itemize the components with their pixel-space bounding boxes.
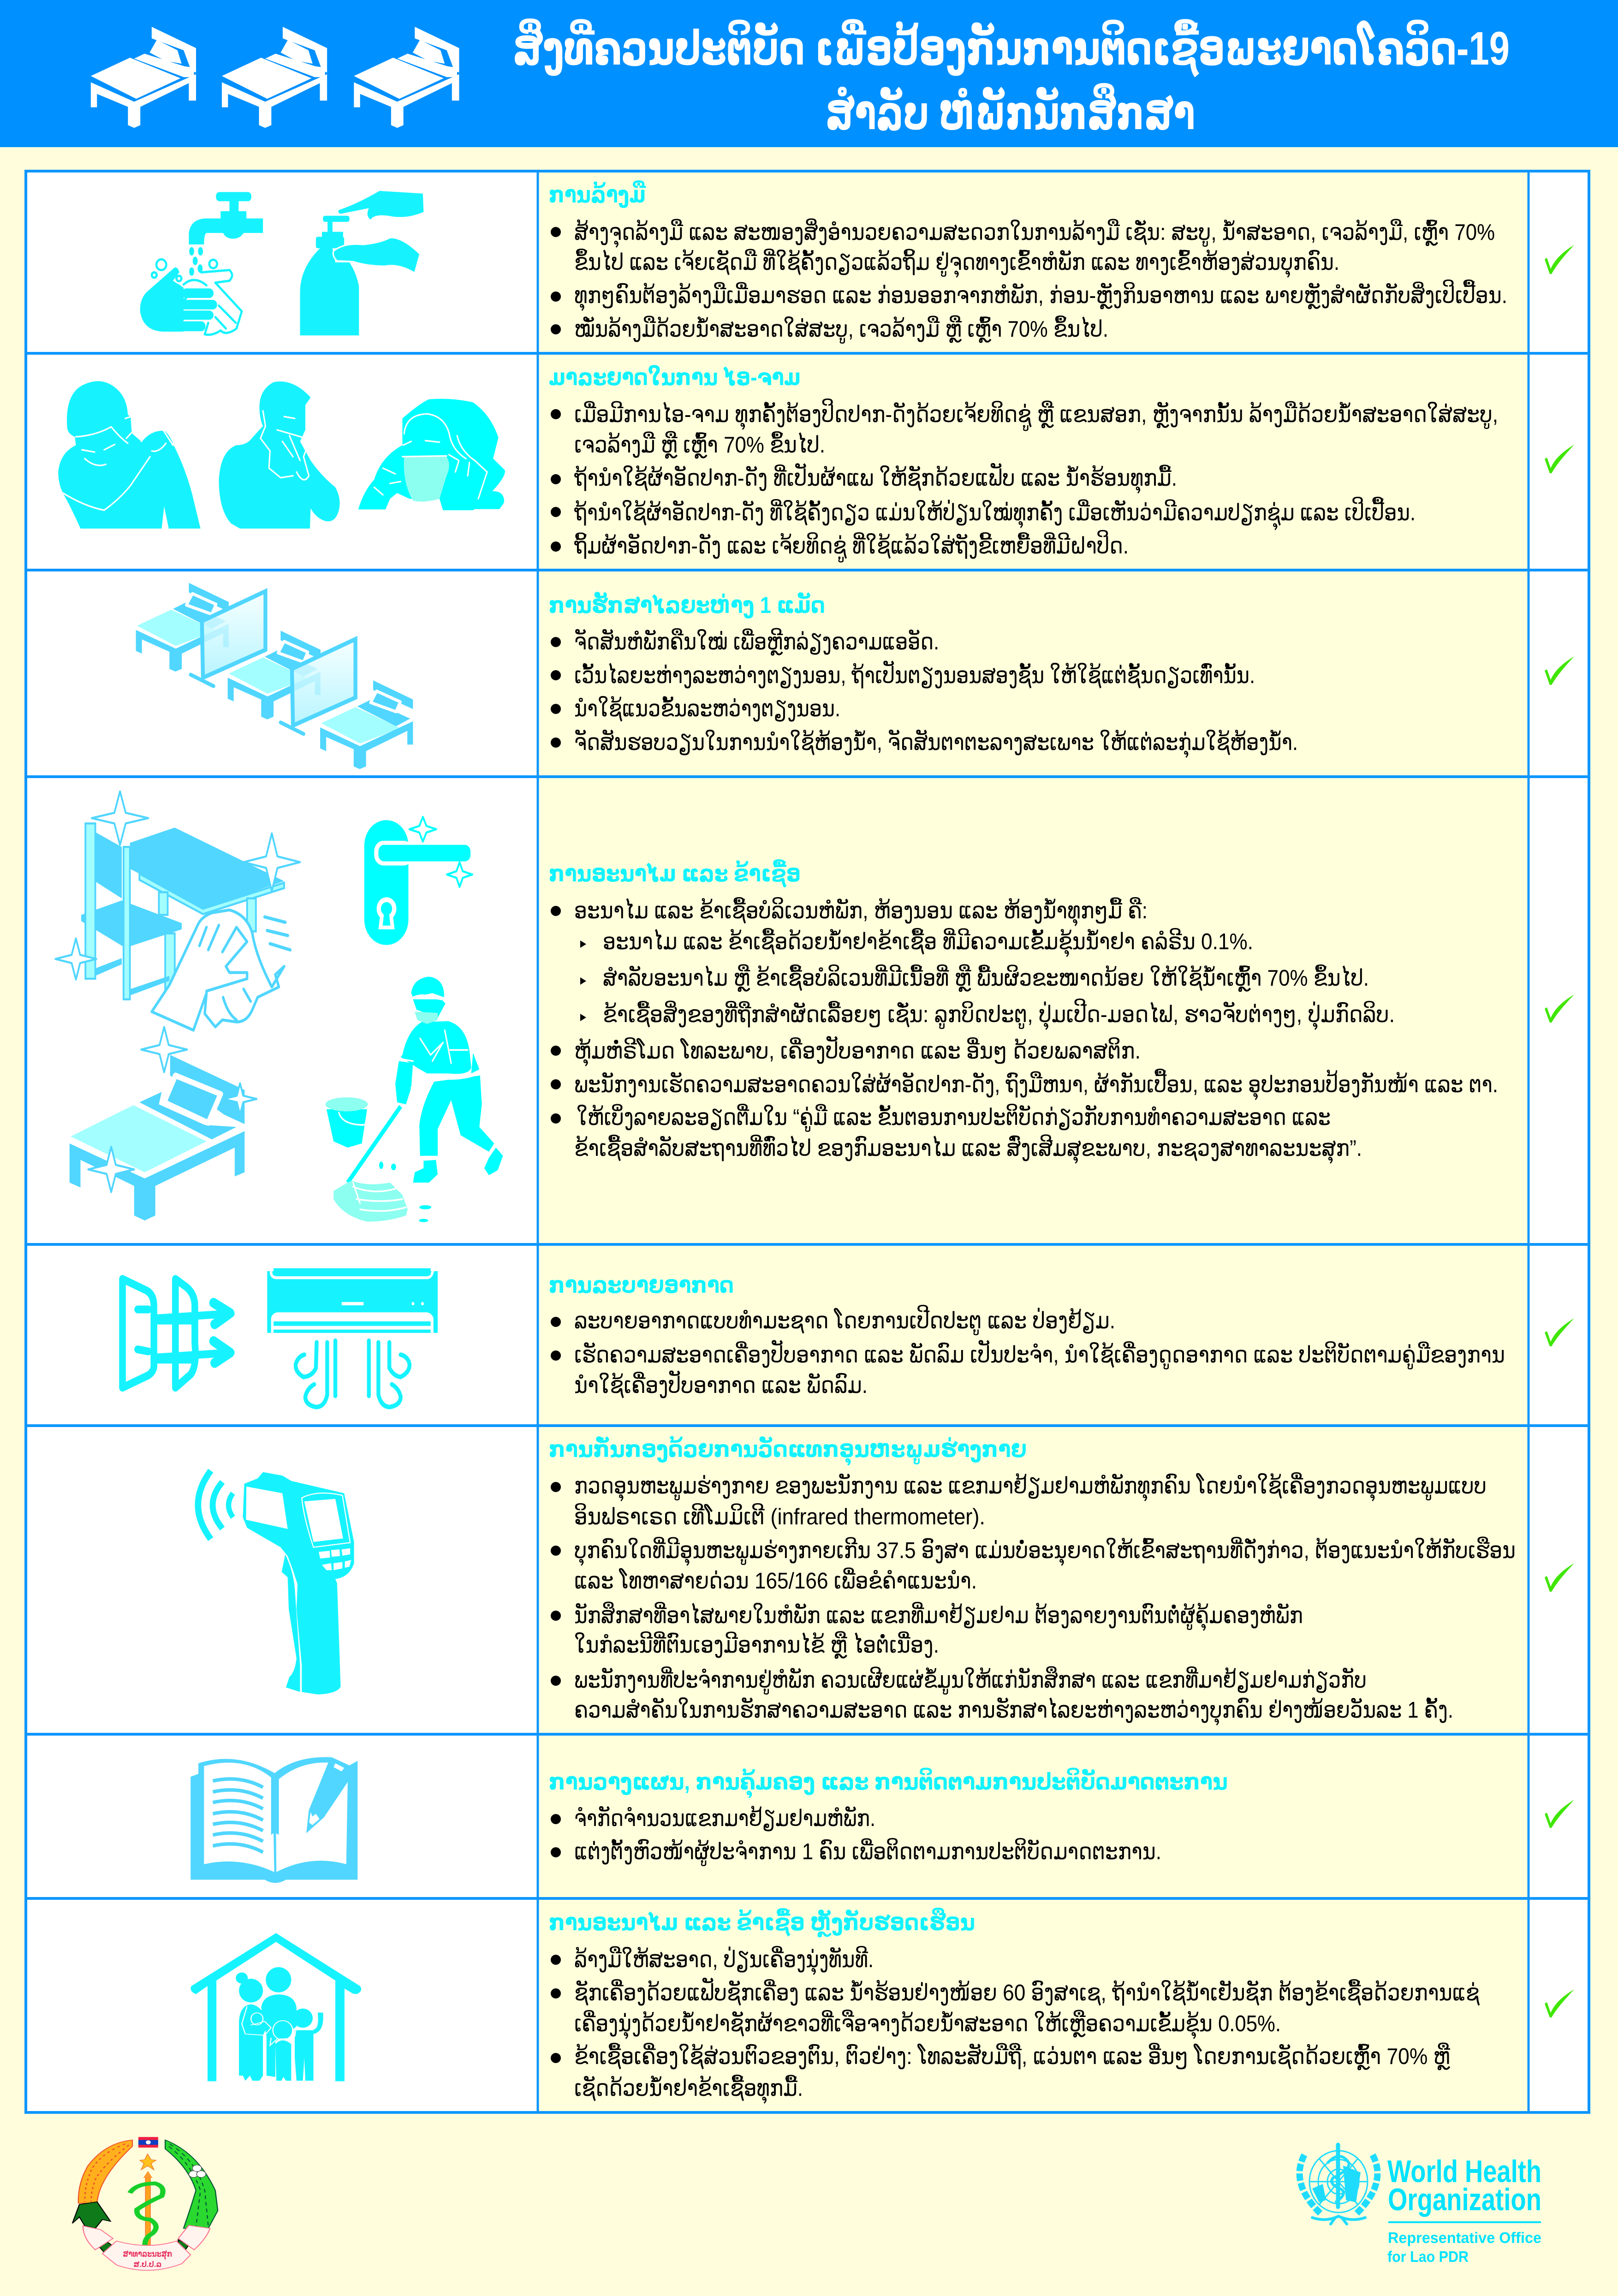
- sub-element: emblem caption: [123, 2249, 172, 2269]
- bullet list: ຈັດສັນຫໍພັກຄືນໃໝ່ ເພື່ອຫຼີກລ່ຽງຄວາມແອອັດ.: [574, 627, 939, 656]
- sub-icon: open window with airflow arrows: [123, 1279, 231, 1388]
- heading: ການກັ່ນກອງດ້ວຍການວັດແທກອຸນຫະພູມຮ່າງກາຍ: [549, 1436, 1027, 1466]
- icon: window and air conditioner: [123, 1267, 438, 1407]
- bullet list: ນຳໃຊ້ເຄື່ອງປັບອາກາດ ແລະ ພັດລົມ.: [574, 1370, 868, 1398]
- bullet list: ຈຳກັດຈຳນວນແຂກມາຢ້ຽມຢາມຫໍພັກ.: [574, 1805, 875, 1832]
- text: cleaning and disinfection: [549, 859, 1498, 1164]
- bullet list: ໃຫ້ເບິ່ງລາຍລະອຽດຕື່ມໃນ “ຄູ່ມື ແລະ ຂັ້ນຕອນການປະຕິບັດກ່ຽວກັບການທຳຄວາມສະອາດ ແລະ: [577, 1103, 1331, 1132]
- bullet list: ລ້າງມືໃຫ້ສະອາດ, ປ່ຽນເຄື່ອງນຸ່ງທັນທີ.: [574, 1945, 874, 1975]
- bullet list: ຖ້ານຳໃຊ້ຜ້າອັດປາກ-ດັງ ທີ່ເປັນຜ້າແພ ໃຫ້ຊັກດ້ວຍແຟັບ ແລະ ນ້ຳຮ້ອນທຸກມື້.: [574, 462, 1177, 494]
- text: cough and sneeze etiquette: [549, 364, 1498, 563]
- sub-icon: sparkles: [55, 791, 300, 1192]
- text: ventilation: [549, 1272, 1505, 1398]
- header band: [0, 0, 1618, 147]
- sub-icon: chair and table: [81, 823, 284, 999]
- sub-icon: door handle: [364, 817, 472, 945]
- sub-element: pink ribbons with text: [83, 2225, 210, 2270]
- bullet list: ໝັ່ນລ້າງມືດ້ວຍນ້ຳສະອາດໃສ່ສະບູ, ເຈວລ້າງມື ຫຼື ເຫຼົ້າ 70% ຂຶ້ນໄປ.: [574, 315, 1108, 344]
- sub-element: emblem caption: ສ.ປ.ປ.ລ: [133, 2260, 162, 2269]
- bullet list: ຖ້ານຳໃຊ້ຜ້າອັດປາກ-ດັງ ທີ່ໃຊ້ຄັ້ງດຽວ ແມ່ນໃຫ້ປ່ຽນໃໝ່ທຸກຄັ້ງ ເມື່ອເຫັນວ່າມີຄວາມປຽກຊຸ່ມ ແລະ ເປິເປື້ອນ.: [574, 496, 1416, 531]
- sub-element: rod and snake: [130, 2171, 163, 2250]
- text: temperature screening: [549, 1436, 1516, 1726]
- heading: ມາລະຍາດໃນການ ໄອ-ຈາມ: [549, 364, 801, 390]
- logo: Lao Ministry of Health emblem: [72, 2137, 218, 2270]
- bullet list: [551, 896, 1498, 1164]
- bullet list: ແລະ ໂທຫາສາຍດ່ວນ 165/166 ເພື່ອຂໍຄຳແນະນຳ.: [574, 1567, 977, 1594]
- bullet list: ຂ້າເຊື້ອສຳລັບສະຖານທີ່ທົ່ວໄປ ຂອງກົມອະນາໄມ ແລະ ສົ່ງເສີມສຸຂະພາບ, ກະຊວງສາທາລະນະສຸກ”.: [574, 1134, 1362, 1164]
- bullet list: ບຸກຄົນໃດທີ່ມີອຸນຫະພູມຮ່າງກາຍເກີນ 37.5 ອົງສາ ແມ່ນບໍ່ອະນຸຍາດໃຫ້ເຂົ້າສະຖານທີ່ດັ່ງກ່າວ, ຕ້ອງແນະນຳໃຫ້ກັບເຮືອນ: [574, 1536, 1516, 1566]
- heading: ການອະນາໄມ ແລະ ຂ້າເຊື້ອ ຫຼັງກັບຮອດເຮືອນ: [549, 1907, 975, 1938]
- sub-element: WHO wordmark: Representative Office: [1388, 2229, 1541, 2246]
- sub-element: WHO emblem: [1300, 2145, 1377, 2224]
- heading: ການລະບາຍອາກາດ: [549, 1272, 734, 1298]
- icon: tap, hand washing and soap pump: [140, 191, 423, 335]
- bullet list: ເຄື່ອງນຸ່ງດ້ວຍນ້ຳຢາຊັກຜ້າຂາວທີ່ເຈືອຈາງດ້ວຍນ້ຳສະອາດ ໃຫ້ເຫຼືອຄວາມເຂັ້ມຂຸ້ນ 0.05%.: [574, 2009, 1281, 2040]
- bullet list: ເມື່ອມີການໄອ-ຈາມ ທຸກຄັ້ງຕ້ອງປິດປາກ-ດັງດ້ວຍເຈ້ຍທິດຊູ່ ຫຼື ແຂນສອກ, ຫຼັງຈາກນັ້ນ ລ້າງມືດ້ວຍນ້ຳສະອາດໃສ່ສະບູ,: [574, 398, 1498, 431]
- sub-element: WHO wordmark: Organization: [1388, 2182, 1541, 2217]
- bullet list: ພະນັກງານທີ່ປະຈຳການຢູ່ຫໍພັກ ຄວນເຜີຍແຜ່ຂໍ້ມູນໃຫ້ແກ່ນັກສຶກສາ ແລະ ແຂກທີ່ມາຢ້ຽມຢາມກ່ຽວກັບ: [574, 1665, 1367, 1695]
- text: physical distancing: [549, 592, 1298, 758]
- sub-icon: air conditioner: [267, 1267, 438, 1407]
- sub-icon: cleaner with mop and bucket: [326, 977, 503, 1222]
- heading: ການອະນາໄມ ແລະ ຂ້າເຊື້ອ: [549, 859, 801, 888]
- icon: people covering cough and wearing mask: [58, 381, 505, 529]
- bullet list: [551, 1945, 1480, 2104]
- icon: cleaning table, bed, door handle and mop: [55, 791, 503, 1222]
- bullet list: ສຳລັບອະນາໄມ ຫຼື ຂ້າເຊື້ອບໍລິເວນທີ່ມີເນື້ອທີ່ ຫຼື ພື້ນຜິວຂະໜາດນ້ອຍ ໃຫ້ໃຊ້ນ້ຳເຫຼົ້າ 70% ຂຶ້ນໄປ.: [603, 964, 1369, 992]
- bullet list: ອິນຟຣາເຣດ ເທີໂມມິເຕີ (infrared thermometer).: [574, 1502, 985, 1529]
- text: planning and monitoring: [549, 1767, 1228, 1866]
- text: hand washing: [549, 180, 1507, 344]
- bullet list: ນຳໃຊ້ແນວຂັ້ນລະຫວ່າງຕຽງນອນ.: [574, 696, 840, 722]
- bullet list: ທຸກໆຄົນຕ້ອງລ້າງມືເມື່ອມາຮອດ ແລະ ກ່ອນອອກຈາກຫໍພັກ, ກ່ອນ-ຫຼັງກິນອາຫານ ແລະ ພາຍຫຼັງສຳຜັດກັບສິ່ງເປິເປື້ອນ.: [574, 279, 1507, 311]
- bullet list: ຂ້າເຊື້ອສິ່ງຂອງທີ່ຖືກສຳຜັດເລື້ອຍໆ ເຊັ່ນ: ລູກບິດປະຕູ, ປຸ່ມເປີດ-ມອດໄຟ, ຮາວຈັບຕ່າງໆ, ປຸ່ມກົດລິບ.: [603, 998, 1395, 1030]
- icon: family in a house: [190, 1933, 361, 2081]
- bullet list: ເຊັດດ້ວຍນ້ຳຢາຂ້າເຊື້ອທຸກມື້.: [574, 2074, 803, 2104]
- bullet list: [551, 1471, 1516, 1726]
- logo: World Health Organization: [1300, 2145, 1541, 2265]
- sub-element: leaf wreath: [165, 2140, 218, 2228]
- bullet list: ກວດອຸນຫະພູມຮ່າງກາຍ ຂອງພະນັກງານ ແລະ ແຂກມາຢ້ຽມຢາມຫໍພັກທຸກຄົນ ໂດຍນຳໃຊ້ເຄື່ອງກວດອຸນຫະພູມແບບ: [574, 1471, 1487, 1502]
- bullet list: ຫຸ້ມຫໍ່ຣີໂມດ ໂທລະພາບ, ເຄື່ອງປັບອາກາດ ແລະ ອື່ນໆ ດ້ວຍພລາສຕິກ.: [574, 1035, 1141, 1067]
- sub-icon: gloved hand wiping: [152, 910, 290, 1030]
- sub-element: WHO wordmark: for Lao PDR: [1387, 2248, 1469, 2265]
- bullet list: ຂ້າເຊື້ອເຄື່ອງໃຊ້ສ່ວນຕົວຂອງຕົນ, ຕົວຢ່າງ: ໂທລະສັບມືຖື, ແວ່ນຕາ ແລະ ອື່ນໆ ໂດຍການເຊັດດ້ວຍເຫຼົ້າ 70% ຫຼື: [574, 2042, 1451, 2070]
- bullet list: ອະນາໄມ ແລະ ຂ້າເຊື້ອບໍລິເວນຫໍພັກ, ຫ້ອງນອນ ແລະ ຫ້ອງນ້ຳທຸກໆມື້ ຄື:: [574, 896, 1148, 927]
- icon: three beds: [91, 27, 459, 128]
- title line 2: ສຳລັບ ຫໍພັກນັກສຶກສາ: [826, 83, 1195, 139]
- sub-element: rice wreath: [78, 2140, 132, 2203]
- sub-icon: bed: [70, 1055, 244, 1220]
- bullet list: ເຮັດຄວາມສະອາດເຄື່ອງປັບອາກາດ ແລະ ພັດລົມ ເປັນປະຈຳ, ນຳໃຊ້ເຄື່ອງດູດອາກາດ ແລະ ປະຕິບັດຕາມຄູ່ມືຂອງການ: [574, 1339, 1505, 1369]
- bullet list: ສ້າງຈຸດລ້າງມື ແລະ ສະໜອງສິ່ງອຳນວຍຄວາມສະດວກໃນການລ້າງມື ເຊັ່ນ: ສະບູ, ນ້ຳສະອາດ, ເຈວລ້າງມື, ເຫຼົ້າ 70%: [574, 218, 1495, 248]
- bullet list: [551, 398, 1498, 563]
- sub-element: WHO wordmark: [1387, 2154, 1541, 2265]
- bullet list: ອະນາໄມ ແລະ ຂ້າເຊື້ອດ້ວຍນ້ຳຢາຂ້າເຊື້ອ ທີ່ມີຄວາມເຂັ້ມຂຸ້ນນ້ຳຢາ ຄລໍຣີນ 0.1%.: [603, 927, 1253, 958]
- sub-element: WHO wordmark: World Health: [1387, 2154, 1541, 2189]
- sub-element: star: [140, 2154, 156, 2170]
- bullet list: ຖິ້ມຜ້າອັດປາກ-ດັງ ແລະ ເຈ້ຍທິດຊູ່ ທີ່ໃຊ້ແລ້ວໃສ່ຖັງຂີ້ເຫຍື້ອທີ່ມີຝາປິດ.: [574, 529, 1129, 563]
- bullet list: ເຈວລ້າງມື ຫຼື ເຫຼົ້າ 70% ຂຶ້ນໄປ.: [574, 430, 825, 459]
- bullet list: ເວັ້ນໄລຍະຫ່າງລະຫວ່າງຕຽງນອນ, ຖ້າເປັນຕຽງນອນສອງຊັ້ນ ໃຫ້ໃຊ້ແຕ່ຊັ້ນດຽວເທົ່ານັ້ນ.: [574, 660, 1255, 689]
- bullet list: ລະບາຍອາກາດແບບທຳມະຊາດ ໂດຍການເປີດປະຕູ ແລະ ປ່ອງຢ້ຽມ.: [574, 1304, 1115, 1335]
- bullet list: [551, 1805, 1161, 1866]
- bullet list: [551, 1304, 1505, 1398]
- icon: infrared thermometer: [198, 1471, 354, 1695]
- icon: beds separated by partitions: [136, 583, 413, 769]
- bullet list: ຊັກເຄື່ອງດ້ວຍແຟັບຊັກເຄື່ອງ ແລະ ນ້ຳຮ້ອນຢ່າງໜ້ອຍ 60 ອົງສາເຊ, ຖ້ານຳໃຊ້ນ້ຳເຢັນຊັກ ຕ້ອງຂ້າເຊື້ອດ້ວຍການແຊ່: [574, 1977, 1480, 2006]
- heading: ການລ້າງມື: [549, 180, 646, 208]
- sub-element: emblem caption: ສາທາລະນະສຸກ: [123, 2249, 172, 2260]
- bullet list: ແຕ່ງຕັ້ງຫົວໜ້າຜູ້ປະຈຳການ 1 ຄົນ ເພື່ອຕິດຕາມການປະຕິບັດມາດຕະການ.: [574, 1837, 1161, 1866]
- checkmarks column: [1545, 245, 1574, 2017]
- bullet list: ຈັດສັນຮອບວຽນໃນການນຳໃຊ້ຫ້ອງນ້ຳ, ຈັດສັນຕາຕະລາງສະເພາະ ໃຫ້ແຕ່ລະກຸ່ມໃຊ້ຫ້ອງນ້ຳ.: [574, 729, 1298, 758]
- bullet list: ໃນກໍລະນີທີ່ຕົນເອງມີອາການໄຂ້ ຫຼື ໄອຕໍ່ເນື່ອງ.: [574, 1630, 939, 1659]
- bullet list: ນັກສຶກສາທີ່ອາໄສພາຍໃນຫໍພັກ ແລະ ແຂກທີ່ມາຢ້ຽມຢາມ ຕ້ອງລາຍງານຕົນຕໍ່ຜູ້ຄຸ້ມຄອງຫໍພັກ: [574, 1601, 1303, 1631]
- text: cleaning after returning home: [549, 1907, 1480, 2104]
- bullet list: ຂຶ້ນໄປ ແລະ ເຈ້ຍເຊັດມື ທີ່ໃຊ້ຄັ້ງດຽວແລ້ວຖິ້ມ ຢູ່ຈຸດທາງເຂົ້າຫໍພັກ ແລະ ທາງເຂົ້າຫ້ອງສ່ວນບຸກຄົນ.: [574, 248, 1339, 278]
- sub-element: Lao flag: [138, 2137, 158, 2147]
- heading: ການວາງແຜນ, ການຄຸ້ມຄອງ ແລະ ການຕິດຕາມການປະຕິບັດມາດຕະການ: [549, 1767, 1228, 1799]
- icon: open book and pencil: [190, 1757, 357, 1883]
- bullet list: [551, 218, 1507, 344]
- bullet list: [551, 627, 1298, 758]
- heading: ການຮັກສາໄລຍະຫ່າງ 1 ແມັດ: [549, 592, 825, 619]
- bullet list: ພະນັກງານເຮັດຄວາມສະອາດຄວນໃສ່ຜ້າອັດປາກ-ດັງ, ຖົງມືຫນາ, ຜ້າກັນເປື້ອນ, ແລະ ອຸປະກອນປ້ອງກັນໜ້າ ແລະ ຕາ.: [574, 1068, 1498, 1100]
- bullet list: ຄວາມສຳຄັນໃນການຮັກສາຄວາມສະອາດ ແລະ ການຮັກສາໄລຍະຫ່າງລະຫວ່າງບຸກຄົນ ຢ່າງໜ້ອຍວັນລະ 1 ຄັ້ງ.: [574, 1696, 1453, 1726]
